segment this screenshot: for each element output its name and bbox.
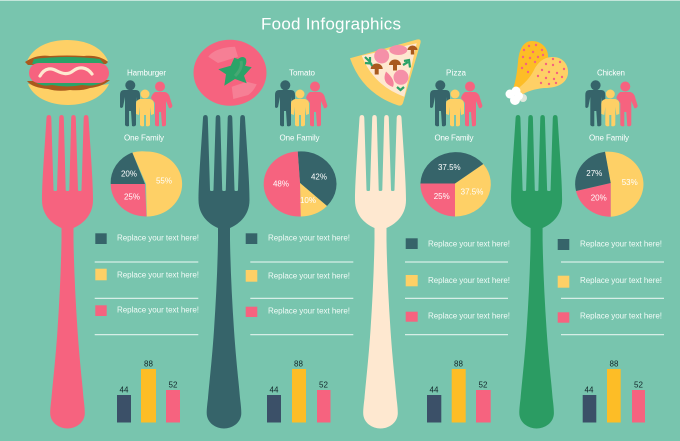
legend: Hamburger: Replace your text here! bbox=[117, 306, 199, 314]
pie chart: Chicken: 53% bbox=[622, 178, 638, 187]
legend: Pizza: Replace your text here! bbox=[428, 240, 510, 248]
icon: tomato bbox=[194, 40, 266, 106]
bar chart: Tomato bbox=[267, 360, 330, 422]
title: Food Infographics bbox=[261, 14, 401, 34]
label: One Family 1: One Family bbox=[124, 134, 164, 142]
pie chart: Chicken: 20% bbox=[591, 194, 607, 202]
label: Tomato: Tomato bbox=[289, 68, 316, 78]
pie chart: Chicken bbox=[575, 152, 643, 217]
pie chart: Pizza bbox=[420, 152, 491, 217]
legend: Chicken: Replace your text here! bbox=[580, 276, 662, 285]
bar chart: Tomato: 88 bbox=[294, 360, 303, 368]
pie chart: Chicken: 27% bbox=[586, 169, 602, 178]
pie chart: Tomato: 48% bbox=[273, 180, 289, 188]
legend: Chicken bbox=[558, 239, 664, 335]
icon: family 4 bbox=[585, 80, 638, 126]
bar chart: Pizza: 52 bbox=[479, 380, 488, 390]
legend: Tomato: Replace your text here! bbox=[268, 306, 350, 316]
pie chart: Pizza: 37.5% bbox=[461, 188, 483, 196]
pie chart: Tomato: 10% bbox=[300, 196, 316, 205]
label: One Family 3: One Family bbox=[434, 134, 474, 142]
label: Pizza: Pizza bbox=[446, 68, 467, 78]
legend: Pizza: Replace your text here! bbox=[428, 312, 510, 320]
bar chart: Pizza bbox=[427, 360, 491, 422]
pie chart: Tomato bbox=[264, 151, 337, 217]
icon: chicken leg bbox=[506, 41, 568, 105]
pie chart: Pizza: 37.5% bbox=[438, 163, 461, 172]
fork: dark teal bbox=[198, 115, 250, 428]
icon: pizza bbox=[350, 39, 421, 106]
bar chart: Hamburger bbox=[117, 360, 180, 422]
icon: hamburger bbox=[25, 40, 110, 105]
legend: Tomato: Replace your text here! bbox=[268, 272, 350, 280]
legend: Chicken: Replace your text here! bbox=[580, 240, 662, 248]
bar chart: Pizza: 44 bbox=[430, 386, 439, 394]
icon: family 2 bbox=[275, 80, 328, 126]
legend: Hamburger: Replace your text here! bbox=[117, 270, 199, 280]
bar chart: Chicken: 52 bbox=[634, 380, 643, 390]
pie chart: Hamburger: 25% bbox=[124, 192, 140, 202]
legend: Pizza: Replace your text here! bbox=[428, 276, 510, 285]
pie chart: Tomato: 42% bbox=[311, 172, 327, 182]
pie chart: Hamburger: 20% bbox=[121, 170, 137, 178]
fork: pink bbox=[42, 115, 93, 428]
icon: family 1 bbox=[120, 80, 172, 126]
bar chart: Chicken: 88 bbox=[610, 360, 619, 368]
fork: green bbox=[511, 115, 562, 428]
label: Chicken: Chicken bbox=[597, 68, 625, 78]
pie chart: Hamburger bbox=[111, 151, 182, 217]
bar chart: Hamburger: 52 bbox=[169, 380, 178, 390]
legend: Hamburger: Replace your text here! bbox=[117, 234, 199, 242]
bar chart: Hamburger: 44 bbox=[120, 386, 129, 394]
legend: Hamburger bbox=[95, 233, 199, 335]
legend: Tomato: Replace your text here! bbox=[268, 234, 350, 242]
bar chart: Hamburger: 88 bbox=[144, 360, 153, 368]
bar chart: Tomato: 44 bbox=[270, 386, 279, 394]
fork: cream bbox=[355, 115, 406, 428]
pie chart: Pizza: 25% bbox=[434, 192, 450, 201]
label: Hamburger: Hamburger bbox=[127, 68, 166, 78]
bar chart: Chicken bbox=[583, 360, 645, 422]
bar chart: Pizza: 88 bbox=[454, 360, 463, 368]
label: One Family 2: One Family bbox=[280, 134, 320, 142]
pie chart: Hamburger: 55% bbox=[156, 176, 172, 186]
legend: Chicken: Replace your text here! bbox=[580, 312, 662, 320]
label: One Family 4: One Family bbox=[589, 134, 629, 142]
bar chart: Tomato: 52 bbox=[319, 380, 328, 390]
legend: Pizza bbox=[405, 238, 510, 335]
bar chart: Chicken: 44 bbox=[585, 386, 594, 394]
legend: Tomato bbox=[246, 233, 353, 335]
icon: family 3 bbox=[430, 80, 482, 126]
